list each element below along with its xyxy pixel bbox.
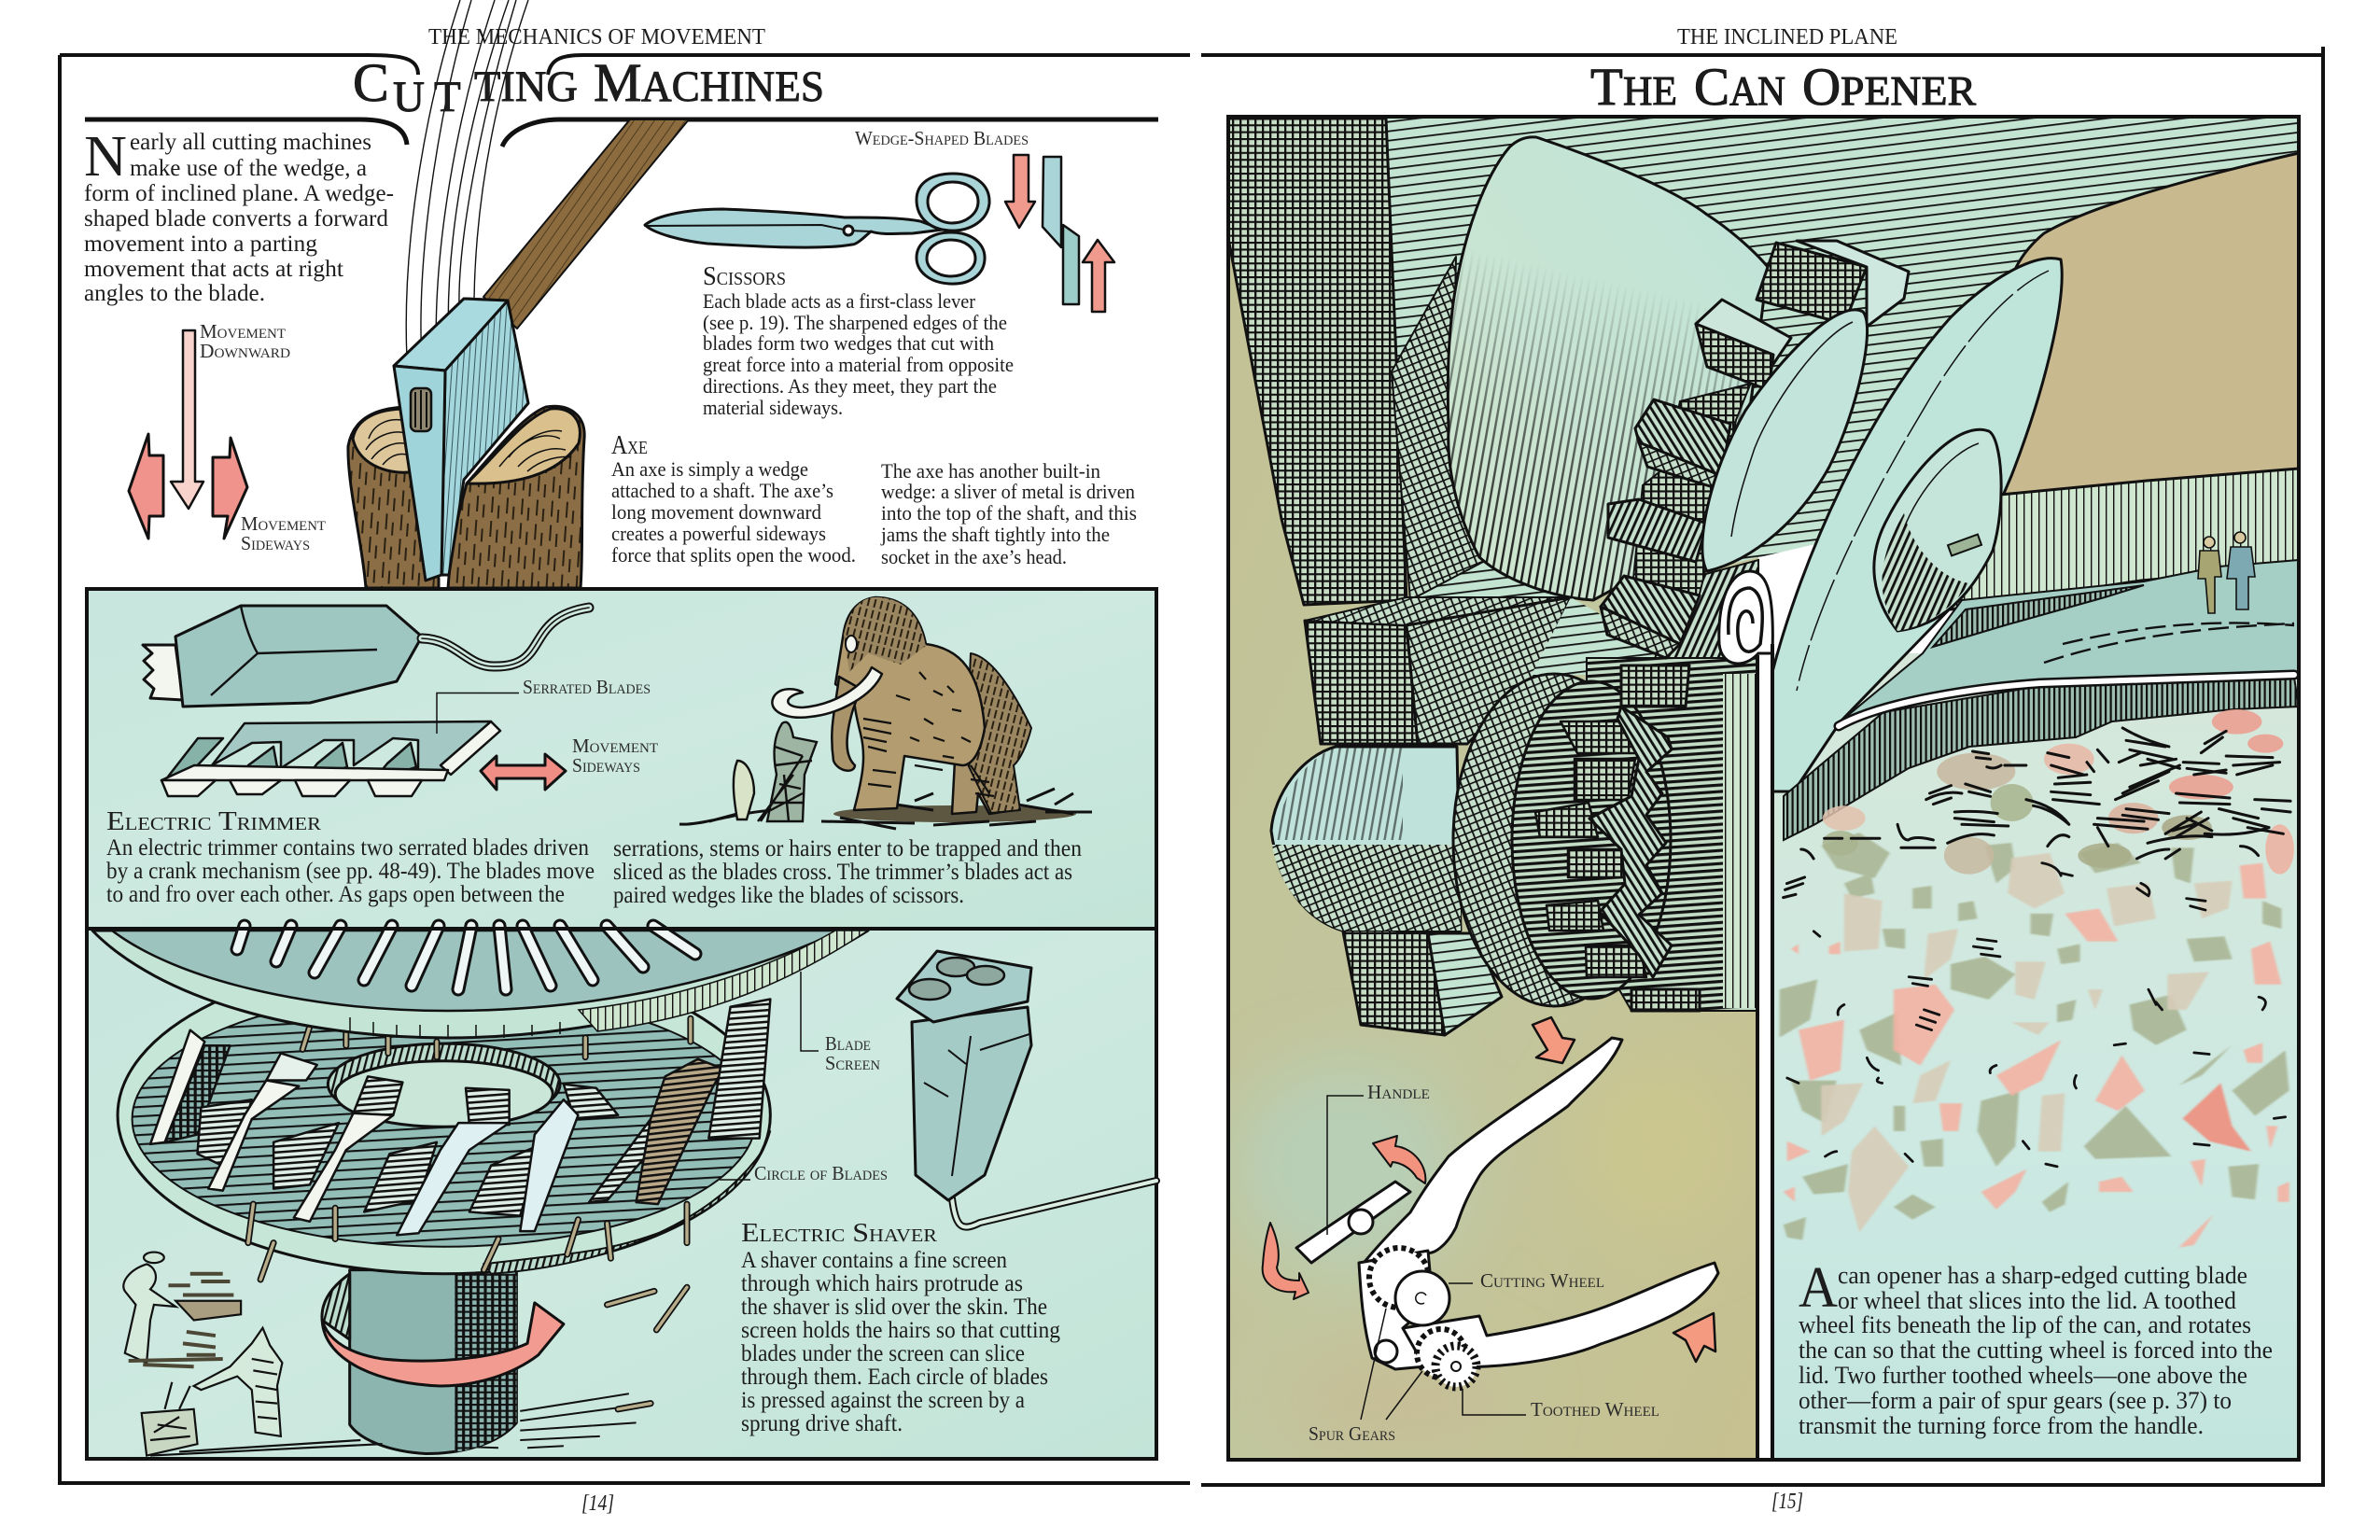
text: electric shaver: screen holds the hairs so that cutting — [741, 1318, 1060, 1343]
axe motion lines — [406, 0, 528, 369]
khaki blotches — [1780, 833, 2289, 1239]
panel: can opener artwork — [1228, 117, 2299, 1460]
text: axe: force that splits open the wood. — [611, 543, 856, 567]
lower spur gear — [1417, 1329, 1465, 1378]
page number 15: [15] — [1771, 1490, 1803, 1514]
lower block side — [1407, 597, 1571, 744]
label: handle: Handle — [1367, 1081, 1430, 1103]
title: cutting machines: M — [594, 52, 642, 113]
bottom block side — [1428, 933, 1502, 1035]
text: axe: creates a powerful sideways — [611, 522, 826, 545]
leader: circle of blades — [720, 1179, 750, 1181]
text: scissors: material sideways. — [703, 396, 843, 419]
rear gear backing near curl — [1652, 560, 1758, 674]
gear tooth 3 — [1635, 399, 1730, 490]
gear hub face — [1512, 681, 1671, 999]
pink and khaki surface washes — [1823, 709, 2294, 875]
dome of wheel housing — [1448, 137, 1768, 600]
shaver head — [897, 951, 1031, 1022]
text: electric shaver: sprung drive shaft. — [741, 1411, 903, 1436]
lid dashed score lines — [2044, 623, 2294, 663]
gear tooth 5 — [1601, 576, 1700, 658]
label: circle of blades: Circle of Blades — [754, 1162, 888, 1184]
rotation arrow — [322, 1303, 564, 1386]
block side face — [1392, 257, 1483, 600]
text: electric trimmer: paired wedges like the blades of scissors. — [613, 883, 964, 908]
label: blade screen — [825, 1032, 880, 1074]
cutting wheel — [1395, 1271, 1449, 1325]
tiny man with barrow — [142, 1328, 383, 1456]
loose hairs — [248, 1018, 691, 1409]
title: cutting machines: ACHINES — [641, 63, 824, 111]
text: can opener explanation with drop cap: other—form a pair of spur gears (see p. 37) to — [1799, 1387, 2232, 1414]
tan can side — [1988, 153, 2299, 504]
running head: right page: THE INCLINED PLANE — [1677, 25, 1897, 49]
text: electric trimmer: serrations, stems or hairs enter to be trapped and then — [613, 836, 1082, 861]
text: axe: long movement downward — [611, 500, 821, 524]
text: can opener explanation with drop cap: wheel fits beneath the lip of the can, and rotates — [1799, 1311, 2251, 1338]
illustration: shaver — [897, 951, 1156, 1227]
top teeth backing — [1633, 327, 1773, 597]
text: electric trimmer — [106, 806, 1082, 908]
text: can opener explanation with drop cap: transmit the turning force from the handle. — [1799, 1412, 2204, 1439]
shaft eye — [411, 388, 431, 431]
zigzag gear band — [1589, 707, 1672, 977]
title: cutting machines: T — [434, 73, 461, 121]
illustration: mammoth — [679, 597, 1092, 829]
central hole — [328, 1043, 560, 1127]
panel: electric shaver — [87, 926, 1156, 1459]
title: cutting machines: TING — [474, 63, 578, 111]
cutting blades — [150, 999, 770, 1235]
label: movement downward: Downward — [200, 340, 290, 362]
small figures on lid — [2198, 532, 2255, 613]
illustration: scissors — [645, 174, 989, 284]
text: electric shaver: through them. Each circle of blades — [741, 1365, 1048, 1390]
central divider — [1757, 644, 1772, 1460]
intro text with drop cap: movement into a parting — [84, 231, 317, 257]
mammoth body — [835, 597, 985, 810]
gear tooth 1 — [1757, 241, 1909, 327]
text: axe — [611, 430, 856, 567]
text: electric shaver: the shaver is slid over the skin. The — [741, 1295, 1047, 1320]
intro text with drop cap — [84, 125, 394, 306]
fur marks — [863, 672, 994, 796]
label: serrated blades: Serrated Blades — [523, 676, 651, 698]
title: the can opener: AN — [1729, 68, 1785, 114]
can inner wall — [1784, 678, 2299, 840]
cylinder end — [1271, 747, 1461, 931]
curved arrow: upper — [1373, 1136, 1425, 1183]
drive shaft — [350, 1270, 516, 1454]
background: right lower — [1772, 653, 2299, 1460]
lower handle — [1403, 1263, 1718, 1369]
blade disc teal surface — [133, 991, 756, 1247]
title: the can opener: HE — [1623, 68, 1677, 114]
text: scissors: Each blade acts as a first-class lever — [703, 289, 976, 313]
lower block front — [1305, 621, 1418, 744]
lower block top edge — [1305, 597, 1571, 625]
top screen disc — [87, 926, 1156, 1038]
double arrow: movement sideways — [481, 754, 566, 790]
tusks — [772, 667, 882, 718]
illustration: axe in log — [348, 119, 689, 588]
shaft hatching — [455, 1274, 516, 1451]
label: movement sideways — [572, 735, 658, 777]
leaders — [1327, 1096, 1526, 1420]
slots in screen — [237, 926, 695, 989]
running head: left page: THE MECHANICS OF MOVEMENT — [428, 25, 765, 49]
crank knob — [1349, 1210, 1373, 1234]
text: can opener explanation with drop cap — [1799, 1256, 2273, 1439]
title: cutting machines: C — [353, 52, 389, 113]
text: electric shaver: is pressed against the screen by a — [741, 1388, 1025, 1413]
shaver cord — [952, 1181, 1156, 1227]
text: can opener explanation with drop cap: can opener has a sharp-edged cutting blade — [1838, 1262, 2247, 1289]
illustration: hand-held can opener — [1263, 1017, 1718, 1445]
can wall — [1951, 469, 2299, 609]
text: can opener explanation with drop cap: the can so that the cutting wheel is forced into the — [1799, 1337, 2273, 1364]
pink arrow: lower handle — [1673, 1313, 1715, 1362]
arrow: movement downward — [171, 330, 203, 509]
mammoth eye — [846, 636, 857, 652]
text: electric shaver — [741, 1218, 1060, 1436]
text: electric shaver: blades under the screen can slice — [741, 1341, 1025, 1366]
shaver body — [912, 1007, 1031, 1200]
can lid — [1841, 560, 2299, 721]
background: khaki left — [1228, 117, 1758, 1460]
figures beside mammoth — [734, 722, 817, 821]
lid rim — [1839, 675, 2294, 726]
rim teeth — [483, 1130, 770, 1274]
label: blade screen: Screen — [825, 1052, 880, 1074]
text: can opener explanation with drop cap: A — [1799, 1256, 1838, 1320]
diagram: wedge-shaped blades in section — [1005, 155, 1114, 312]
title: cutting machines: U — [393, 73, 425, 121]
blade top face — [394, 299, 508, 371]
arrow: sideways left — [129, 434, 163, 539]
crank handle — [1296, 1182, 1410, 1263]
gear tooth 4 — [1608, 499, 1707, 562]
text: axe: attached to a shaft. The axe’s — [611, 479, 833, 502]
text: can opener explanation with drop cap: or wheel that slices into the lid. A toothed — [1838, 1287, 2236, 1314]
trimmer cord — [422, 608, 589, 666]
panel: electric trimmer — [87, 589, 1156, 929]
blade: lower — [1063, 225, 1079, 304]
drive shaft shadow — [383, 1393, 637, 1448]
intro text with drop cap: make use of the wedge, a — [130, 156, 367, 181]
lid lip hatched — [1933, 585, 2144, 647]
text: electric trimmer: An electric trimmer contains two serrated blades driven — [106, 835, 589, 861]
text: scissors — [703, 261, 1014, 419]
leader: serrated blades — [437, 693, 519, 734]
rear legs — [952, 761, 1014, 814]
label: cutting wheel: Cutting Wheel — [1480, 1269, 1604, 1292]
intro text with drop cap: angles to the blade. — [84, 281, 265, 306]
white curl of cut lid — [1719, 571, 1772, 664]
head hair — [844, 597, 926, 672]
top crosshatched block — [1228, 119, 1407, 605]
beige blotches — [1821, 853, 2233, 1232]
lower block behind gears — [1631, 989, 1700, 1011]
text: axe wedge note — [880, 459, 1137, 568]
food blotches — [1780, 833, 2289, 1248]
text: electric trimmer: sliced as the blades cross. The trimmer’s blades act as — [613, 860, 1072, 885]
blade side face — [441, 299, 528, 575]
page number 14: [14] — [581, 1491, 614, 1516]
front gear teeth — [1535, 721, 1646, 977]
text: electric shaver: through which hairs protrude as — [741, 1271, 1023, 1296]
blade disc rim — [118, 957, 770, 1274]
text: electric trimmer: Electric Trimmer — [106, 806, 322, 836]
label: wedge-shaped blades: Wedge-Shaped Blades — [855, 127, 1029, 149]
arrow: down — [1005, 155, 1035, 228]
background wash patches — [1230, 1053, 1648, 1279]
rear gear region — [1587, 658, 1758, 1011]
trimmer blade tip — [143, 645, 183, 700]
bottom block front — [1342, 927, 1445, 1035]
cutting wheel rear disc — [1702, 310, 1868, 571]
text: electric trimmer: to and fro over each other. As gaps open between the — [106, 882, 565, 907]
hatched web — [1532, 597, 1664, 675]
tiny man with hair bundle — [123, 1253, 241, 1366]
title: the can opener: T — [1590, 58, 1623, 117]
label: spur gears: Spur Gears — [1309, 1422, 1395, 1445]
hub of cutting wheel — [1874, 429, 2001, 631]
title: the can opener: PENER — [1841, 68, 1977, 114]
pink arrow: top handle — [1533, 1017, 1575, 1063]
text: axe: Axe — [611, 430, 648, 460]
leader: blade screen — [801, 972, 819, 1051]
text: can opener explanation with drop cap: lid. Two further toothed wheels—one above the — [1799, 1362, 2247, 1389]
text: axe wedge note: wedge: a sliver of metal is driven — [881, 480, 1135, 503]
blade front face — [394, 366, 445, 581]
text: axe wedge note: into the top of the shaft, and this — [881, 501, 1137, 525]
text: scissors: directions. As they meet, they part the — [703, 374, 997, 398]
mammoth fringe — [966, 653, 1031, 813]
arrow: sideways right — [213, 438, 247, 539]
text: electric trimmer: by a crank mechanism (see pp. 48-49). The blades move — [106, 859, 595, 884]
text: axe wedge note: socket in the axe’s head. — [881, 545, 1067, 568]
rear gear right column — [1723, 674, 1758, 1008]
salmon blotches — [1784, 863, 2289, 1248]
bottom panel edge — [1228, 117, 2299, 1460]
trimmer body — [175, 606, 422, 707]
intro text with drop cap: early all cutting machines — [130, 130, 371, 155]
blade: upper — [1043, 157, 1061, 247]
frame plate — [1359, 1251, 1433, 1369]
label: movement downward — [200, 320, 290, 362]
right log end grain — [467, 409, 580, 483]
arrow: up — [1083, 240, 1114, 312]
upper hatched background — [1386, 119, 2299, 600]
white divider bar — [1758, 644, 1772, 1460]
label: movement sideways: Sideways — [241, 532, 310, 554]
intro text with drop cap: movement that acts at right — [84, 257, 343, 282]
left page frame — [60, 55, 1190, 1483]
big cutting disc — [1772, 259, 2062, 791]
scattered ink marks — [1787, 863, 2286, 1167]
upper spur gear — [1369, 1248, 1429, 1308]
left log end grain — [353, 409, 416, 472]
drive shaft and blade disc artwork — [118, 957, 770, 1456]
title: the can opener: O — [1802, 58, 1841, 117]
text: electric shaver: Electric Shaver — [741, 1218, 938, 1248]
text: scissors: (see p. 19). The sharpened edges of the — [703, 311, 1007, 334]
serrated blades assembly — [161, 721, 500, 796]
text: axe wedge note: The axe has another built-in — [881, 459, 1100, 483]
label: movement sideways: Movement — [572, 735, 658, 757]
food hatching strokes — [1784, 728, 2290, 898]
crushed food surface — [1784, 709, 2294, 898]
axe handle — [483, 119, 689, 329]
intro text with drop cap: shaped blade converts a forward — [84, 206, 388, 231]
text: scissors: blades form two wedges that cut with — [703, 331, 994, 355]
right page frame — [1201, 47, 2323, 1485]
text: electric shaver: A shaver contains a fine screen — [741, 1248, 1007, 1273]
title: the can opener: C — [1694, 58, 1729, 117]
movement arrows diagram — [129, 330, 247, 539]
curved arrow: lower — [1263, 1223, 1309, 1299]
right half of log — [448, 406, 584, 588]
label: movement downward: Movement — [200, 320, 286, 343]
intro text with drop cap: N — [84, 125, 127, 189]
label: blade screen: Blade — [825, 1032, 871, 1055]
gear hub barrel — [1453, 674, 1655, 1006]
left half of log — [348, 407, 439, 588]
text: scissors: Scissors — [703, 261, 786, 291]
text: axe wedge note: jams the shaft tightly into the — [880, 523, 1110, 546]
pivot hole — [1375, 1340, 1397, 1363]
gear tooth 2 — [1696, 300, 1791, 390]
trunk — [832, 677, 861, 771]
label: movement sideways — [241, 512, 326, 554]
toothed wheel — [1435, 1346, 1477, 1387]
upper handle — [1365, 1038, 1622, 1262]
shaft band rear — [322, 1274, 350, 1339]
intro text with drop cap: form of inclined plane. A wedge- — [84, 181, 394, 206]
upper block behind gears — [1621, 665, 1689, 707]
label: toothed wheel: Toothed Wheel — [1531, 1398, 1659, 1421]
ground — [679, 789, 1092, 829]
text: axe: An axe is simply a wedge — [611, 457, 808, 481]
label: movement sideways: Movement — [241, 512, 326, 535]
head rollers — [909, 958, 1004, 1000]
text: scissors: great force into a material from opposite — [703, 353, 1014, 376]
label: movement sideways: Sideways — [572, 754, 640, 777]
